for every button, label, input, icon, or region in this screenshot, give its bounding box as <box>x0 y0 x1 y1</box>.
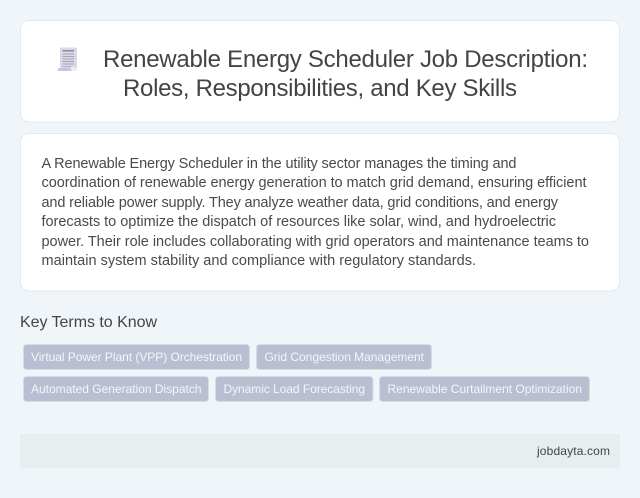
heading: Renewable Energy Scheduler Job Description: <box>103 46 588 73</box>
chip: Dynamic Load <box>216 376 373 402</box>
footer <box>20 434 620 468</box>
panel: description card <box>20 134 620 291</box>
chip: Renewable Curtailment <box>380 376 590 402</box>
footer source text: jobdayta.com <box>536 444 610 458</box>
chip: Virtual Power Plant <box>24 344 250 370</box>
chip: Automated Generation <box>24 376 208 402</box>
chip: Automated Generation: Automated Generation Dispatch <box>31 382 202 396</box>
chip: Virtual Power Plant: Virtual Power Plant (VPP) Orchestration <box>31 350 242 364</box>
chip: Dynamic Load: Dynamic Load Forecasting <box>224 382 365 396</box>
text block: description: A Renewable Energy Scheduler in the utility sector manages the timing and <box>42 156 516 172</box>
chip: Renewable Curtailment: Renewable Curtailment Optimization <box>388 382 582 396</box>
text block: description: coordination of renewable energy generation to match grid demand, ensuring efficient <box>42 175 586 191</box>
chip: Grid Congestion: Grid Congestion Management <box>264 350 425 364</box>
text block: description: maintain system stability and compliance with regulatory standards. <box>42 253 476 269</box>
heading: Roles, Responsibilities, and Key Skills <box>123 75 517 102</box>
text block: description: forecasts to optimize the dispatch of resources like solar, wind, and hydroelectric <box>42 214 556 230</box>
text block: description: and reliable power supply. They analyze weather data, grid conditions, and energy <box>42 195 559 211</box>
icon: document scroll <box>58 48 77 71</box>
key terms chips <box>24 344 590 402</box>
text block: description <box>42 156 589 269</box>
panel: title card <box>20 20 620 122</box>
chip: Grid Congestion <box>256 344 432 370</box>
heading <box>103 46 588 102</box>
heading: key terms: Key Terms to Know <box>20 314 157 331</box>
text block: description: power. Their role includes collaborating with grid operators and maintenance teams to <box>42 234 589 250</box>
